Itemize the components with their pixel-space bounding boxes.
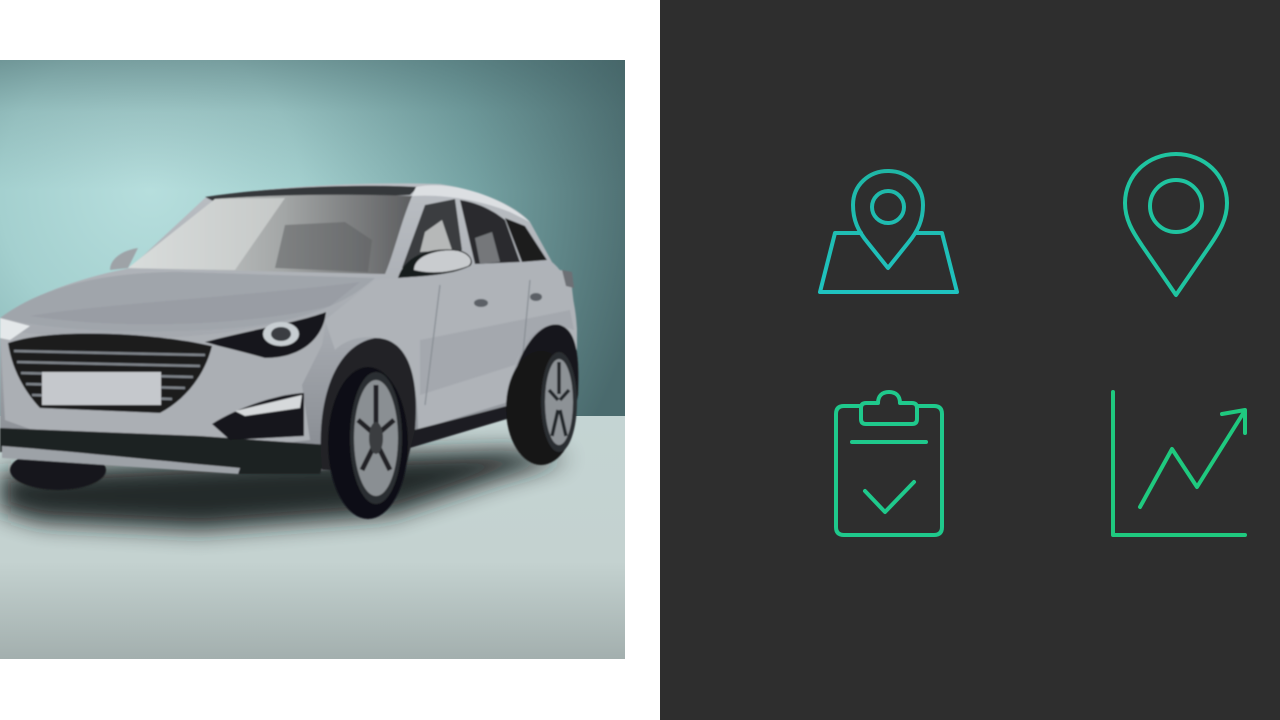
rear light (562, 270, 574, 288)
windshield (128, 195, 412, 274)
lower bumper (0, 393, 330, 474)
icon: clipboard with check mark (836, 392, 942, 535)
front wheel (321, 338, 416, 519)
dark panel (660, 0, 1280, 720)
icon: location pin (1125, 154, 1227, 295)
car illustration (0, 183, 578, 519)
side panel (325, 264, 577, 430)
studio backdrop (0, 60, 625, 659)
front bumper panel (2, 340, 321, 443)
front grille (8, 333, 212, 413)
car shadow (0, 450, 570, 530)
icon: line chart with rising arrow (1113, 392, 1245, 535)
car body (0, 183, 577, 474)
far front wheel (9, 458, 107, 490)
icon: map with location pin (820, 171, 957, 292)
photo: silver SUV in studio (0, 60, 625, 659)
door lines and handles (425, 280, 530, 405)
headlights (0, 312, 326, 358)
lower sill (410, 406, 508, 448)
side mirror (398, 249, 472, 278)
rear wheel (506, 324, 578, 465)
bonnet (8, 272, 373, 314)
roof (205, 186, 418, 202)
side windows (402, 199, 462, 268)
